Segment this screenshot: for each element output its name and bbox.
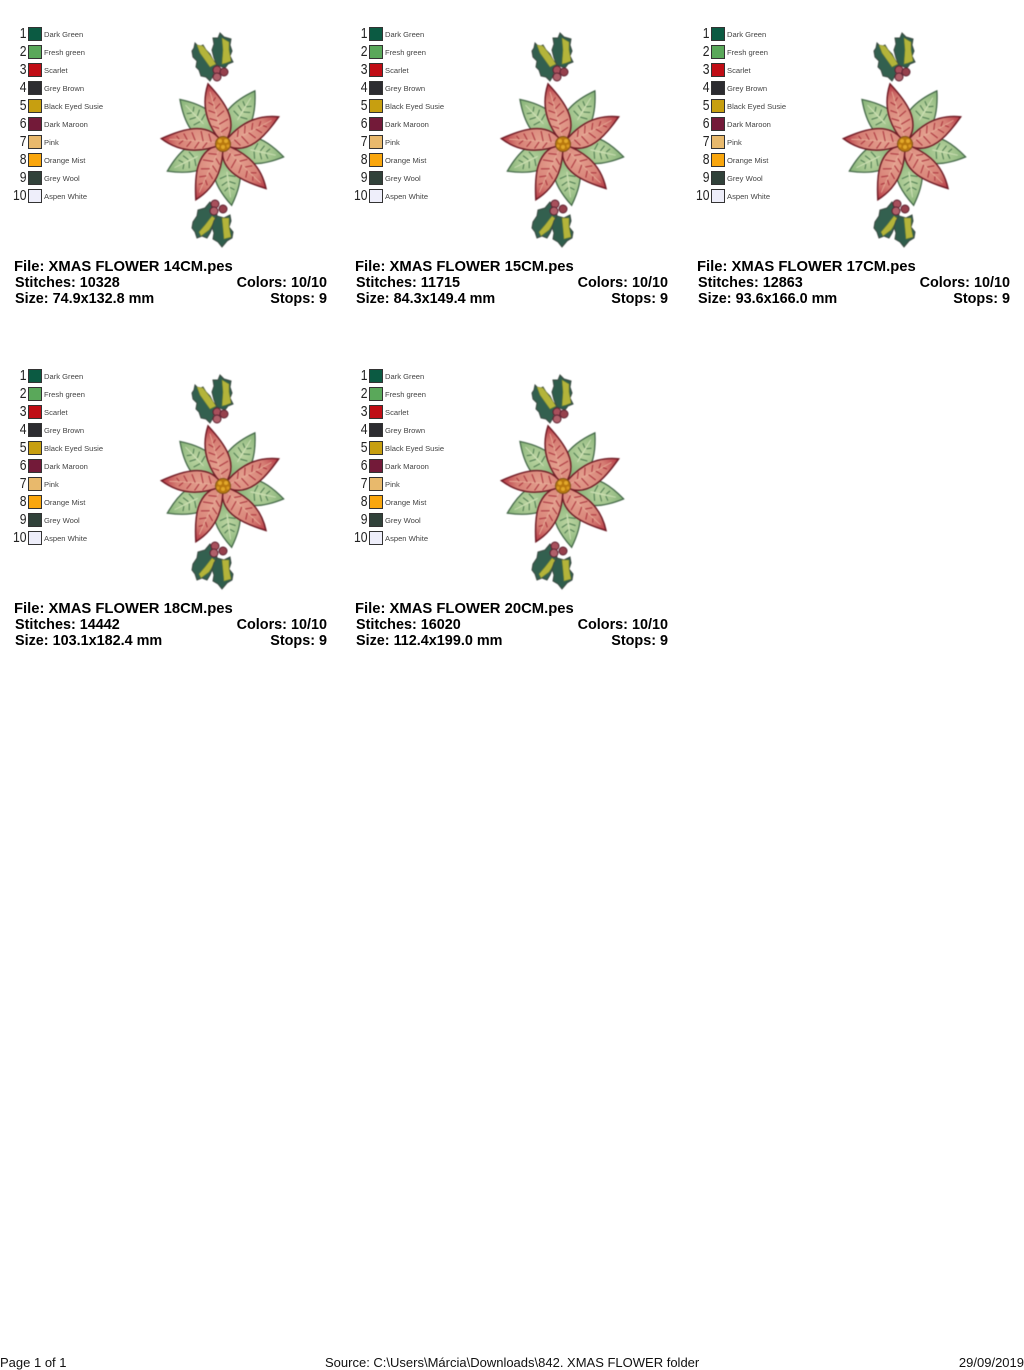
colour legend: 1 (20, 368, 26, 384)
colour legend: 8 (20, 152, 26, 168)
icon: bottom holly (192, 542, 233, 589)
colour legend: Pink (385, 480, 400, 488)
colour legend: 3 (703, 62, 710, 78)
footer: date: 29/09/2019 (959, 1355, 1024, 1370)
colour legend: Orange Mist (44, 498, 85, 506)
footer: source path: Source: C:\Users\Márcia\Downloads\842. XMAS FLOWER folder (325, 1355, 699, 1370)
file details (697, 259, 1010, 307)
colour legend: Orange Mist (44, 156, 85, 164)
colour legend: 2 (20, 44, 26, 60)
colour legend: Aspen White (385, 192, 428, 200)
colour legend (354, 368, 444, 546)
colour legend: 8 (20, 494, 26, 510)
file details: Stops: 9 (953, 291, 1010, 307)
colour legend: Grey Wool (44, 174, 80, 182)
colour legend: 3 (20, 404, 26, 420)
colour legend (13, 368, 103, 546)
colour legend: 9 (20, 512, 26, 528)
colour legend: 8 (361, 494, 368, 510)
embroidery design: poinsettia with holly (842, 32, 967, 248)
colour legend: Orange Mist (385, 156, 426, 164)
icon: top holly (532, 33, 573, 81)
colour legend: Dark Green (44, 30, 83, 38)
colour legend: Black Eyed Susie (44, 444, 103, 452)
colour legend: 4 (703, 80, 710, 96)
icon: top holly (874, 33, 915, 81)
panel: XMAS FLOWER 20CM (354, 368, 668, 649)
colour legend: 4 (20, 422, 26, 438)
colour legend: 3 (361, 62, 368, 78)
colour legend: 7 (361, 476, 368, 492)
file details: File: XMAS FLOWER 18CM.pes (14, 601, 233, 617)
file details (14, 259, 327, 307)
colour legend: Dark Green (385, 372, 424, 380)
colour legend: 6 (361, 458, 368, 474)
icon: bottom holly (874, 200, 915, 247)
colour legend: Pink (385, 138, 400, 146)
file details (355, 601, 668, 649)
file details: File: XMAS FLOWER 20CM.pes (355, 601, 574, 617)
colour legend: 3 (20, 62, 26, 78)
colour legend: 1 (361, 368, 368, 384)
colour legend: 9 (361, 512, 368, 528)
colour legend: Aspen White (44, 192, 87, 200)
file details: Size: 74.9x132.8 mm (15, 291, 154, 307)
colour legend: 6 (20, 116, 26, 132)
colour legend: Aspen White (44, 534, 87, 542)
colour legend: 2 (361, 386, 368, 402)
colour legend: Dark Maroon (44, 462, 88, 470)
colour legend: 4 (361, 422, 368, 438)
colour legend: Black Eyed Susie (385, 444, 444, 452)
colour legend: 8 (361, 152, 368, 168)
embroidery design: poinsettia with holly (160, 32, 285, 248)
colour legend: 5 (361, 98, 368, 114)
colour legend: Black Eyed Susie (44, 102, 103, 110)
colour legend: 7 (703, 134, 710, 150)
icon: poinsettia (160, 423, 286, 549)
colour legend: Dark Green (727, 30, 766, 38)
colour legend: 7 (20, 134, 26, 150)
icon: bottom holly (532, 200, 573, 247)
file details: Stops: 9 (611, 291, 668, 307)
colour legend: 10 (13, 188, 26, 204)
colour legend: Scarlet (44, 66, 68, 74)
colour legend: Grey Brown (44, 84, 84, 92)
file details: Colors: 10/10 (237, 275, 327, 291)
colour legend: Dark Maroon (44, 120, 88, 128)
colour legend: 10 (696, 188, 710, 204)
panel: XMAS FLOWER 15CM (354, 26, 668, 307)
colour legend: Dark Maroon (385, 462, 429, 470)
colour legend (696, 26, 786, 204)
file details (355, 259, 668, 307)
icon: poinsettia (160, 81, 286, 207)
file details: Stitches: 12863 (698, 275, 803, 291)
file details: Stitches: 16020 (356, 617, 461, 633)
colour legend: 2 (361, 44, 368, 60)
colour legend (13, 26, 103, 204)
icon: poinsettia (500, 81, 626, 207)
colour legend: Scarlet (727, 66, 751, 74)
colour legend: Fresh green (44, 390, 85, 398)
colour legend: Grey Brown (727, 84, 767, 92)
colour legend: 5 (703, 98, 710, 114)
colour legend: Pink (727, 138, 742, 146)
embroidery design: poinsettia with holly (500, 32, 625, 248)
colour legend: Dark Maroon (727, 120, 771, 128)
colour legend: 5 (20, 98, 26, 114)
colour legend: 9 (703, 170, 710, 186)
colour legend: 6 (20, 458, 26, 474)
colour legend: Grey Brown (44, 426, 84, 434)
colour legend: 6 (703, 116, 710, 132)
icon: poinsettia (500, 423, 626, 549)
icon: top holly (192, 33, 233, 81)
icon: top holly (192, 375, 233, 423)
colour legend: Fresh green (385, 48, 426, 56)
colour legend: 10 (354, 530, 368, 546)
file details: Colors: 10/10 (237, 617, 327, 633)
file details: Size: 84.3x149.4 mm (356, 291, 495, 307)
file details: Stops: 9 (611, 633, 668, 649)
colour legend: 5 (361, 440, 368, 456)
file details: Colors: 10/10 (920, 275, 1010, 291)
colour legend: Fresh green (385, 390, 426, 398)
colour legend: Orange Mist (385, 498, 426, 506)
colour legend: Aspen White (727, 192, 770, 200)
colour legend (354, 26, 444, 204)
colour legend: Scarlet (385, 66, 409, 74)
icon: bottom holly (532, 542, 573, 589)
file details: Size: 112.4x199.0 mm (356, 633, 502, 649)
colour legend: Grey Brown (385, 84, 425, 92)
colour legend: Dark Green (385, 30, 424, 38)
file details (14, 601, 327, 649)
file details: Size: 103.1x182.4 mm (15, 633, 162, 649)
colour legend: Grey Wool (385, 516, 421, 524)
footer: page number: Page 1 of 1 (0, 1355, 66, 1370)
colour legend: Black Eyed Susie (727, 102, 786, 110)
colour legend: 1 (20, 26, 26, 42)
colour legend: Grey Wool (44, 516, 80, 524)
colour legend: Fresh green (44, 48, 85, 56)
file details: Stitches: 10328 (15, 275, 120, 291)
colour legend: Black Eyed Susie (385, 102, 444, 110)
colour legend: Scarlet (44, 408, 68, 416)
colour legend: 7 (361, 134, 368, 150)
colour legend: 9 (20, 170, 26, 186)
colour legend: 9 (361, 170, 368, 186)
colour legend: 4 (20, 80, 26, 96)
colour legend: 6 (361, 116, 368, 132)
file details: Size: 93.6x166.0 mm (698, 291, 837, 307)
embroidery design: poinsettia with holly (160, 374, 285, 590)
colour legend: Grey Wool (385, 174, 421, 182)
colour legend: Grey Brown (385, 426, 425, 434)
panel: XMAS FLOWER 14CM (13, 26, 327, 307)
panel: XMAS FLOWER 17CM (696, 26, 1010, 307)
colour legend: Dark Green (44, 372, 83, 380)
icon: top holly (532, 375, 573, 423)
file details: Stitches: 14442 (15, 617, 120, 633)
file details: Colors: 10/10 (578, 275, 668, 291)
file details: File: XMAS FLOWER 14CM.pes (14, 259, 233, 275)
colour legend: 1 (703, 26, 710, 42)
colour legend: 8 (703, 152, 710, 168)
colour legend: 10 (354, 188, 368, 204)
icon: poinsettia (842, 81, 968, 207)
embroidery design: poinsettia with holly (500, 374, 625, 590)
colour legend: Pink (44, 138, 59, 146)
colour legend: 2 (703, 44, 710, 60)
colour legend: 4 (361, 80, 368, 96)
colour legend: Grey Wool (727, 174, 763, 182)
colour legend: 1 (361, 26, 368, 42)
file details: Stops: 9 (270, 633, 327, 649)
colour legend: Scarlet (385, 408, 409, 416)
file details: Stops: 9 (270, 291, 327, 307)
colour legend: 3 (361, 404, 368, 420)
colour legend: 2 (20, 386, 26, 402)
colour legend: Dark Maroon (385, 120, 429, 128)
colour legend: 7 (20, 476, 26, 492)
file details: Colors: 10/10 (578, 617, 668, 633)
file details: File: XMAS FLOWER 15CM.pes (355, 259, 574, 275)
file details: File: XMAS FLOWER 17CM.pes (697, 259, 916, 275)
colour legend: Fresh green (727, 48, 768, 56)
panel: XMAS FLOWER 18CM (13, 368, 327, 649)
file details: Stitches: 11715 (356, 275, 460, 291)
icon: bottom holly (192, 200, 233, 247)
colour legend: Orange Mist (727, 156, 768, 164)
colour legend: 5 (20, 440, 26, 456)
colour legend: Aspen White (385, 534, 428, 542)
colour legend: Pink (44, 480, 59, 488)
colour legend: 10 (13, 530, 26, 546)
